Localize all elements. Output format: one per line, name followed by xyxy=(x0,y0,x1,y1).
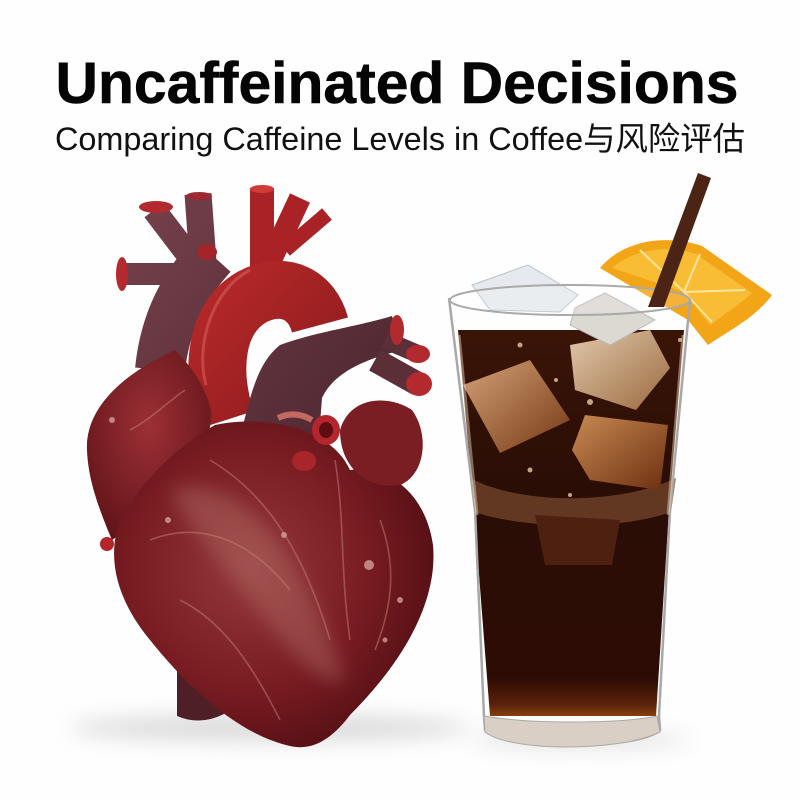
cola xyxy=(458,330,684,716)
rim xyxy=(450,285,690,315)
title: Uncaffeinated Decisions xyxy=(56,51,738,116)
glass base xyxy=(484,716,660,747)
pulmonary trunk xyxy=(238,315,432,450)
icon: glass of iced cola xyxy=(449,265,690,747)
moisture droplets xyxy=(109,417,403,642)
icon: anatomical heart xyxy=(87,185,433,747)
right atrium lobe xyxy=(340,400,423,486)
icon: straw xyxy=(648,173,711,307)
icon: lemon slice xyxy=(600,240,772,345)
surface veins xyxy=(130,390,391,720)
shadows xyxy=(70,714,690,748)
descending vessel xyxy=(177,668,224,721)
lower glass highlight xyxy=(470,478,676,526)
vena cava openings xyxy=(116,192,217,291)
cola surface droplets xyxy=(518,338,682,497)
aorta xyxy=(203,185,327,420)
glass outline xyxy=(449,298,690,745)
ice cubes xyxy=(463,265,670,565)
main ventricle xyxy=(114,421,433,747)
superior vena cava xyxy=(122,194,212,370)
left atrium lobe xyxy=(87,350,211,540)
pale ventricle sheen xyxy=(170,487,345,681)
subtitle: Comparing Caffeine Levels in Coffee与风险评估 xyxy=(55,121,745,157)
wall reflection xyxy=(459,335,683,515)
vessel openings xyxy=(100,414,340,551)
